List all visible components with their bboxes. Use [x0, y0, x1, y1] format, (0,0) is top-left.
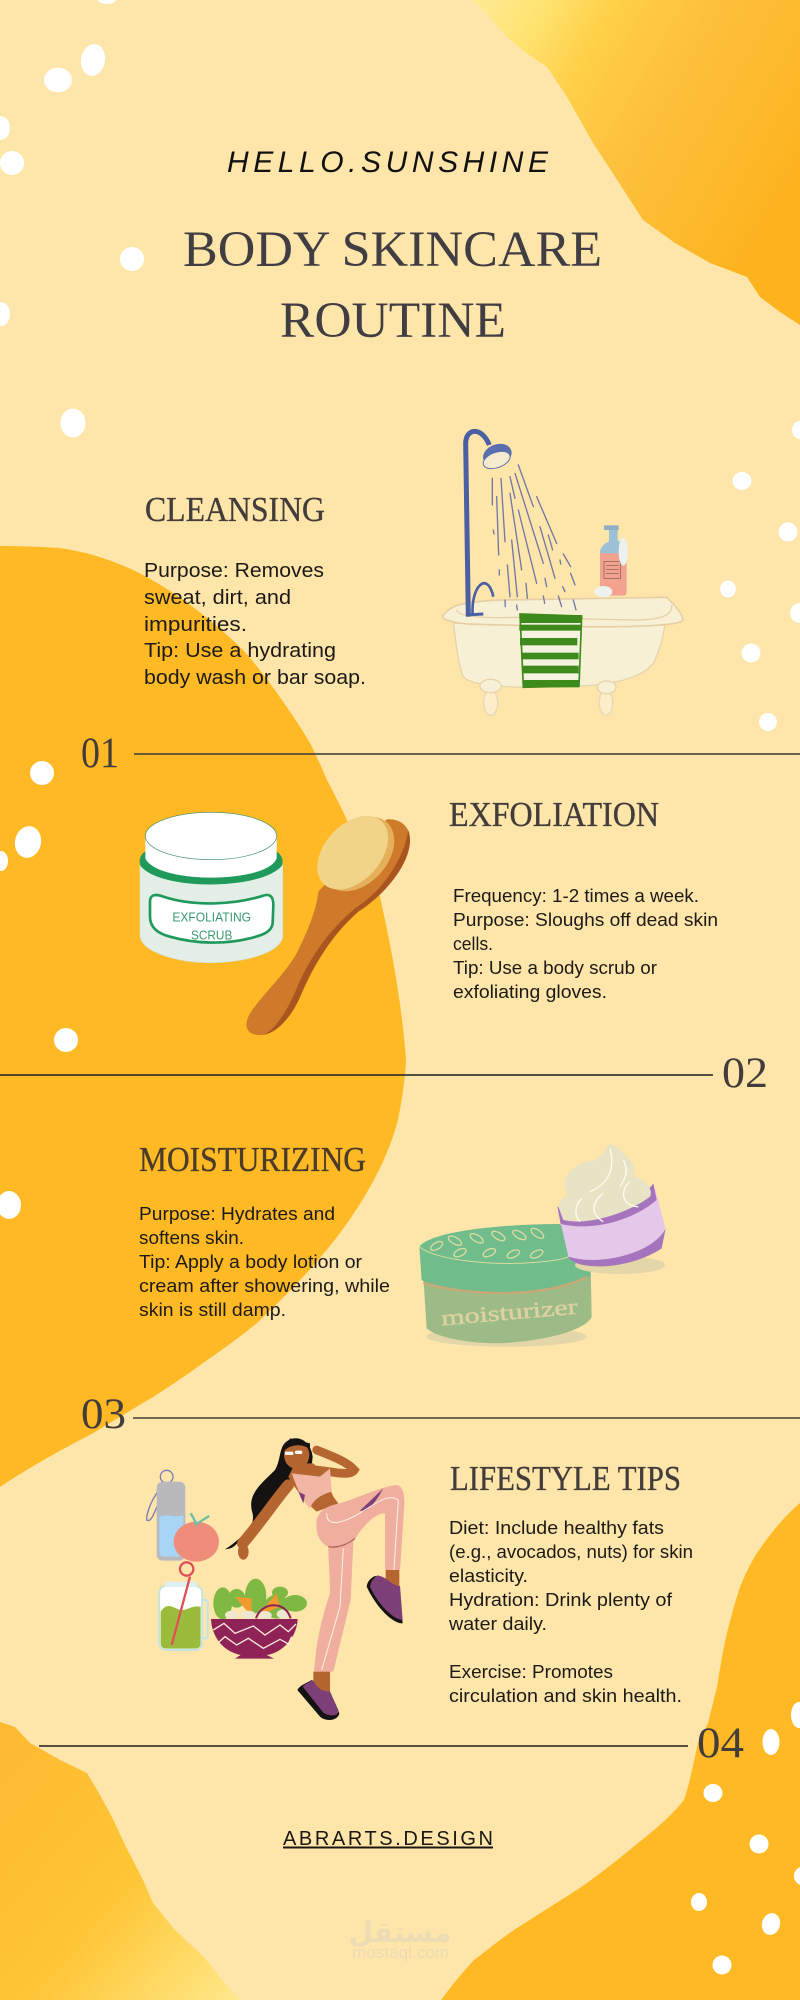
- text block: cleansing: [144, 559, 366, 689]
- text block: lifestyle tips: [448, 1517, 693, 1706]
- text block: lifestyle tips: Hydration: Drink plenty of: [449, 1589, 673, 1610]
- text block: lifestyle tips: Exercise: Promotes: [449, 1661, 613, 1682]
- text block: lifestyle tips: Diet: Include healthy fats: [449, 1517, 664, 1538]
- text block: moisturizing: Purpose: Hydrates and: [139, 1203, 335, 1224]
- divider and number 01: 01: [81, 730, 119, 777]
- text block: lifestyle tips: circulation and skin health.: [449, 1685, 682, 1706]
- text block: lifestyle tips: (e.g., avocados, nuts) for skin: [449, 1541, 693, 1562]
- text block: exfoliation: cells.: [453, 933, 493, 954]
- icon: wooden brush: [246, 802, 410, 1035]
- title: ROUTINE: [280, 293, 506, 349]
- footer link: abrarts.design: ABRARTS.DESIGN: [283, 1828, 493, 1850]
- large yellow blob: left: [0, 546, 406, 1487]
- text block: cleansing: impurities.: [144, 613, 247, 636]
- icon: exfoliating scrub jar: [140, 812, 283, 963]
- icon: salad bowl: [211, 1579, 307, 1659]
- watermark: mostaql: mostaql.com: [352, 1943, 449, 1962]
- divider and number 04: 04: [697, 1720, 744, 1767]
- text block: moisturizing: cream after showering, while: [139, 1275, 390, 1296]
- text block: lifestyle tips: elasticity.: [449, 1565, 528, 1586]
- watercolor blob: top right: [472, 0, 800, 325]
- icon: moisturizer jar: moisturizer: [440, 1294, 579, 1330]
- text block: moisturizing: Tip: Apply a body lotion or: [139, 1251, 362, 1272]
- text block: moisturizing: [139, 1203, 390, 1320]
- text block: moisturizing: softens skin.: [139, 1227, 244, 1248]
- title: [183, 222, 602, 349]
- text block: exfoliation: Frequency: 1-2 times a week.: [453, 885, 699, 906]
- title: BODY SKINCARE: [183, 222, 602, 278]
- text block: cleansing: Tip: Use a hydrating: [144, 639, 336, 662]
- text block: moisturizing: skin is still damp.: [139, 1299, 286, 1320]
- icon: woman exercising: [225, 1438, 404, 1720]
- icon: purple cream jar: [557, 1143, 666, 1274]
- divider and number 03: 03: [81, 1391, 126, 1438]
- section: moisturizing: [139, 1140, 666, 1347]
- icon: smoothie jar: [159, 1562, 208, 1650]
- section: cleansing: [144, 431, 683, 715]
- text block: exfoliation: Purpose: Sloughs off dead skin: [453, 909, 718, 930]
- text block: cleansing: sweat, dirt, and: [144, 586, 291, 609]
- heading: exfoliation: EXFOLIATION: [449, 795, 659, 834]
- watercolor blob: bottom left: [0, 1722, 240, 2000]
- heading: moisturizing: MOISTURIZING: [139, 1140, 366, 1179]
- watermark: mostaql: مستقل: [349, 1916, 451, 1949]
- brand line: hello sunshine: HELLO.SUNSHINE: [227, 146, 549, 179]
- icon: moisturizer jar: [419, 1224, 592, 1347]
- text block: exfoliation: [453, 885, 718, 1002]
- icon: exfoliating scrub jar: EXFOLIATING: [172, 909, 251, 924]
- text block: exfoliation: exfoliating gloves.: [453, 981, 607, 1002]
- icon: exfoliating scrub jar: SCRUB: [191, 927, 232, 942]
- large yellow blob: bottom right: [441, 1503, 800, 2000]
- text block: cleansing: Purpose: Removes: [144, 559, 324, 582]
- icon: water bottle and apple: [147, 1470, 219, 1562]
- icon: bathtub with shower: [443, 431, 683, 715]
- section: lifestyle tips: [147, 1438, 693, 1720]
- section: exfoliation: [140, 795, 718, 1035]
- text block: exfoliation: Tip: Use a body scrub or: [453, 957, 657, 978]
- text block: lifestyle tips: water daily.: [448, 1613, 547, 1634]
- heading: cleansing: CLEANSING: [145, 490, 325, 529]
- heading: lifestyle tips: LIFESTYLE TIPS: [450, 1459, 681, 1498]
- text block: cleansing: body wash or bar soap.: [144, 666, 366, 689]
- divider and number 02: 02: [722, 1050, 768, 1097]
